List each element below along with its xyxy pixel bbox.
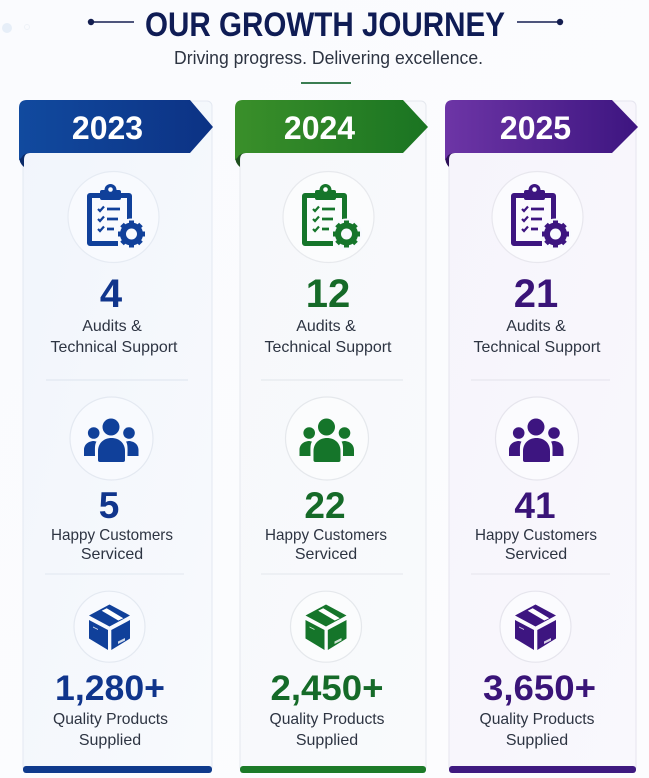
stat: customers: 5 xyxy=(99,485,119,526)
subtitle: Driving progress. Delivering excellence. xyxy=(174,48,483,68)
year ribbon: 2023 xyxy=(72,110,143,146)
stat: customers: Happy Customers xyxy=(475,527,597,544)
stat: customers: Happy Customers xyxy=(51,527,173,544)
year ribbon xyxy=(19,100,213,167)
stat: customers: 22 xyxy=(304,485,346,526)
stat: audits: Audits & xyxy=(296,318,356,335)
stat: products: Quality Products xyxy=(270,711,384,728)
year ribbon xyxy=(235,100,428,167)
card xyxy=(240,101,426,772)
stat: products: Quality Products xyxy=(53,711,168,728)
bottom bar xyxy=(449,766,636,773)
title xyxy=(88,6,563,83)
stat: audits xyxy=(474,272,601,356)
stat: products xyxy=(480,669,596,749)
stat: audits: Audits & xyxy=(82,318,142,335)
stat: audits: 12 xyxy=(306,272,350,316)
year ribbon xyxy=(445,100,638,167)
title ornament: right line and dot xyxy=(517,19,563,25)
year ribbon: 2024 xyxy=(284,110,355,146)
bottom bar xyxy=(23,766,212,773)
stat: customers xyxy=(265,485,387,563)
year ribbon: 2025 xyxy=(500,110,571,146)
stat: audits xyxy=(50,272,178,356)
stat: customers xyxy=(475,485,597,563)
icon: box xyxy=(290,591,362,662)
stat: customers: Happy Customers xyxy=(265,527,387,544)
title ornament: left line and dot xyxy=(88,19,134,25)
icon: box xyxy=(500,591,571,662)
card xyxy=(23,101,212,772)
stat: audits: 4 xyxy=(100,272,123,316)
stat: audits: Technical Support xyxy=(264,339,392,356)
stat: audits xyxy=(264,272,392,356)
stat: products xyxy=(270,669,384,749)
stat: products: Supplied xyxy=(296,732,358,749)
stat: customers: Serviced xyxy=(295,546,357,563)
stat: products: Quality Products xyxy=(480,711,594,728)
heading: OUR GROWTH JOURNEY xyxy=(145,6,505,44)
card xyxy=(449,101,636,772)
icon: box xyxy=(74,591,145,662)
stat: audits: Technical Support xyxy=(474,339,601,356)
stat: products: 3,650+ xyxy=(483,669,596,708)
stat: products: 1,280+ xyxy=(55,669,165,708)
stat: customers: 41 xyxy=(514,485,556,526)
panel: 2024 xyxy=(235,100,428,773)
icon: customers xyxy=(496,397,578,480)
panel: 2023 xyxy=(19,100,213,773)
bottom bar xyxy=(240,766,426,773)
stat: audits: 21 xyxy=(514,272,558,316)
stat: audits: Audits & xyxy=(506,318,566,335)
stat: products: Supplied xyxy=(506,732,568,749)
stat: products: 2,450+ xyxy=(270,669,384,708)
icon: clipboard with gear xyxy=(283,172,374,262)
icon: clipboard with gear xyxy=(492,172,583,262)
icon: customers xyxy=(70,397,153,480)
panel: 2025 xyxy=(445,100,638,773)
icon: customers xyxy=(286,397,368,480)
stat: products xyxy=(53,669,168,749)
icon: clipboard with gear xyxy=(68,172,159,262)
stat: customers: Serviced xyxy=(81,546,143,563)
stat: products: Supplied xyxy=(79,732,141,749)
stat: audits: Technical Support xyxy=(50,339,178,356)
stat: customers: Serviced xyxy=(505,546,567,563)
stat: customers xyxy=(51,485,173,563)
